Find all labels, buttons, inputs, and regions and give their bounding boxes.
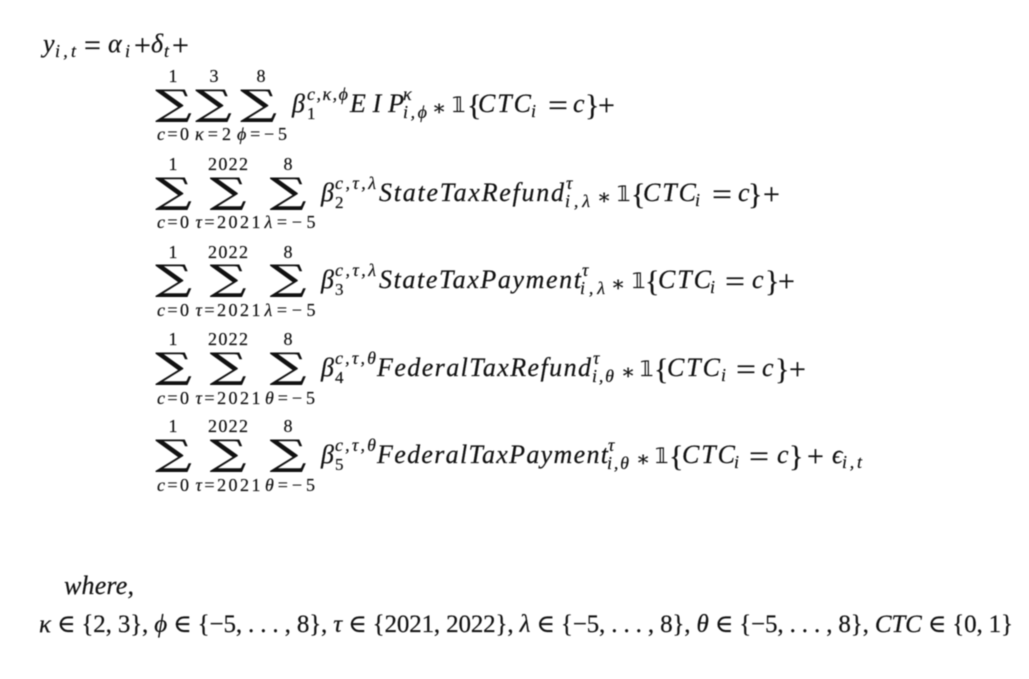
row 1 summations: 3 bbox=[210, 66, 218, 86]
first line: left-hand side: δ bbox=[151, 29, 164, 58]
row 5 expression: ∗ bbox=[636, 447, 650, 471]
row 5 expression: { bbox=[669, 440, 683, 473]
row 5 summations: 2022 bbox=[208, 416, 248, 436]
row 4: federal tax refund term bbox=[156, 329, 806, 408]
row 4 summations bbox=[156, 329, 315, 408]
row 3 summations: ∑ bbox=[210, 259, 246, 299]
row 1: EIP term bbox=[156, 66, 615, 144]
row 2 expression: ∗ bbox=[597, 185, 611, 209]
row 2 expression: StateTaxRefund bbox=[379, 178, 565, 207]
row 3 expression: τ bbox=[582, 260, 589, 280]
row 1 expression: i,ϕ bbox=[403, 102, 427, 122]
row 4 expression: = bbox=[736, 353, 756, 386]
row 1 expression: 1 bbox=[307, 104, 316, 123]
row 2: state tax refund term bbox=[156, 154, 780, 232]
row 2 expression: { bbox=[631, 178, 645, 211]
row 1 expression: 𝟙 bbox=[452, 93, 465, 117]
row 5 expression: β bbox=[320, 440, 334, 469]
row 2 summations: τ=2021 bbox=[196, 212, 260, 232]
row 3 expression: i,λ bbox=[580, 278, 605, 298]
row 5 expression: } bbox=[789, 440, 803, 473]
row 2 expression bbox=[320, 173, 780, 212]
row 1 expression: i bbox=[531, 101, 536, 121]
row 2 expression: β bbox=[320, 178, 334, 207]
first line: left-hand side: i,t bbox=[55, 41, 77, 61]
row 1 summations: 8 bbox=[256, 66, 266, 86]
row 4 expression: CTC bbox=[667, 353, 721, 382]
row 3: state tax payment term bbox=[156, 242, 795, 320]
row 2 expression: c bbox=[738, 178, 750, 207]
row 2 expression: = bbox=[712, 178, 732, 211]
row 4 summations: ∑ bbox=[270, 347, 306, 387]
row 4 expression: 𝟙 bbox=[640, 357, 653, 381]
row 2 summations: ∑ bbox=[156, 172, 192, 212]
row 5 summations: θ=−5 bbox=[265, 475, 315, 495]
row 1 expression: CTC bbox=[478, 89, 532, 118]
row 4 summations: 1 bbox=[168, 329, 178, 349]
index set definitions: κ ∈ {2, 3}, ϕ ∈ {−5, . . . , 8}, τ ∈ {2021, 2022}, λ ∈ {−5, . . . , 8}, θ ∈ {−5, . . . , 8}, CTC ∈ {0, 1} bbox=[39, 611, 1013, 638]
row 1 expression: EIP bbox=[349, 89, 404, 118]
row 3 expression: ∗ bbox=[611, 272, 625, 296]
row 4 expression: τ bbox=[593, 348, 600, 368]
first line: left-hand side: t bbox=[164, 41, 170, 61]
row 4 summations: 2022 bbox=[208, 329, 248, 349]
row 5 expression: c bbox=[777, 440, 789, 469]
first line: left-hand side: = bbox=[84, 29, 101, 62]
row 3 expression: i bbox=[710, 277, 715, 297]
row 5 summations: 8 bbox=[284, 416, 292, 436]
row 2 expression: } bbox=[748, 178, 762, 211]
row 2 expression: + bbox=[763, 178, 780, 211]
row 3 expression: } bbox=[765, 265, 779, 298]
row 5 expression: 5 bbox=[335, 455, 344, 474]
row 3 expression: = bbox=[725, 265, 745, 298]
row 5 expression: τ bbox=[608, 435, 615, 455]
row 4 expression: i,θ bbox=[592, 366, 614, 386]
first line: left-hand side: α bbox=[108, 29, 123, 58]
first line: left-hand side: i bbox=[125, 41, 130, 61]
row 1 expression: ∗ bbox=[432, 96, 446, 120]
row 4 summations: c=0 bbox=[157, 388, 189, 408]
row 1 summations: 1 bbox=[168, 66, 178, 86]
row 2 expression: CTC bbox=[643, 178, 697, 207]
row 3 summations bbox=[156, 242, 316, 320]
row 1 summations: ∑ bbox=[156, 84, 192, 124]
row 5 summations: c=0 bbox=[157, 475, 189, 495]
row 2 summations: 1 bbox=[168, 154, 178, 174]
row 3 expression: c bbox=[752, 265, 764, 294]
row 4 summations: θ=−5 bbox=[265, 388, 315, 408]
row 3 expression: { bbox=[645, 265, 659, 298]
row 4 expression: β bbox=[320, 353, 334, 382]
row 2 summations: ∑ bbox=[270, 172, 306, 212]
row 4 expression: c bbox=[762, 353, 774, 382]
row 4 expression: ∗ bbox=[621, 360, 635, 384]
row 3 expression: CTC bbox=[658, 265, 712, 294]
row 1 summations: c=0 bbox=[157, 124, 189, 144]
row 4 summations: ∑ bbox=[210, 347, 246, 387]
row 2 expression: 2 bbox=[335, 193, 344, 212]
row 4 expression: 4 bbox=[335, 368, 344, 387]
row 4 expression: { bbox=[654, 353, 668, 386]
row 3 summations: c=0 bbox=[157, 300, 189, 320]
row 1 expression: + bbox=[598, 89, 615, 122]
row 1 summations: ∑ bbox=[196, 84, 232, 124]
row 4 summations: ∑ bbox=[156, 347, 192, 387]
row 5 expression: 𝟙 bbox=[655, 444, 668, 468]
row 2 expression: i,λ bbox=[565, 191, 590, 211]
row 5 summations bbox=[156, 416, 315, 495]
row 3 expression: StateTaxPayment bbox=[379, 265, 582, 294]
row 1 summations bbox=[156, 66, 287, 144]
first line: left-hand side: + bbox=[134, 29, 151, 62]
row 3 expression: 3 bbox=[335, 280, 344, 299]
row 1 summations: ∑ bbox=[240, 84, 276, 124]
row 4 expression: c,τ,θ bbox=[335, 348, 376, 368]
row 5 summations: ∑ bbox=[210, 434, 246, 474]
row 3 expression: 𝟙 bbox=[632, 269, 645, 293]
row 3 summations: 1 bbox=[168, 242, 178, 262]
row 2 summations: ∑ bbox=[210, 172, 246, 212]
row 1 summations: ϕ=−5 bbox=[237, 124, 287, 144]
row 5 summations: ∑ bbox=[156, 434, 192, 474]
first line: left-hand side: y bbox=[40, 29, 55, 58]
row 2 expression: 𝟙 bbox=[617, 182, 630, 206]
row 1 summations: κ=2 bbox=[195, 124, 231, 144]
row 1 expression: = bbox=[548, 89, 568, 122]
row 3 expression: β bbox=[320, 265, 334, 294]
row 3 summations: τ=2021 bbox=[196, 300, 260, 320]
row 1 expression: { bbox=[467, 89, 481, 122]
row 2 expression: τ bbox=[566, 173, 573, 193]
row 1 expression: c bbox=[573, 89, 585, 118]
row 5 expression: + bbox=[807, 440, 824, 473]
row 2 summations: 8 bbox=[284, 154, 292, 174]
first line: left-hand side bbox=[40, 29, 189, 62]
row 5 expression: i,t bbox=[842, 452, 863, 472]
row 4 expression: + bbox=[789, 353, 806, 386]
row 5 expression: ϵ bbox=[832, 440, 844, 469]
row 5 summations: ∑ bbox=[270, 434, 306, 474]
row 2 expression: i bbox=[695, 190, 700, 210]
row 5 expression: c,τ,θ bbox=[335, 435, 376, 455]
row 2 expression: c,τ,λ bbox=[335, 173, 376, 193]
row 5 summations: 1 bbox=[168, 416, 178, 436]
row 3 summations: 2022 bbox=[208, 242, 248, 262]
row 3 summations: 8 bbox=[284, 242, 292, 262]
row 3 summations: λ =−5 bbox=[264, 300, 316, 320]
row 5 expression: FederalTaxPayment bbox=[376, 440, 609, 469]
row 4 summations: 8 bbox=[284, 329, 292, 349]
row 1 expression: κ bbox=[403, 84, 412, 104]
row 4 summations: τ=2021 bbox=[196, 388, 260, 408]
row 3 summations: ∑ bbox=[270, 259, 306, 299]
row 2 summations: 2022 bbox=[208, 154, 248, 174]
row 4 expression bbox=[320, 348, 806, 387]
row 3 expression bbox=[320, 260, 795, 299]
row 2 summations: c=0 bbox=[157, 212, 189, 232]
row 1 expression bbox=[291, 84, 615, 123]
row 1 expression: c,κ,ϕ bbox=[307, 84, 348, 104]
row 5 expression: i,θ bbox=[607, 453, 629, 473]
row 4 expression: FederalTaxRefund bbox=[376, 353, 592, 382]
row 4 expression: } bbox=[775, 353, 789, 386]
row 5 expression: CTC bbox=[682, 440, 736, 469]
row 1 expression: β bbox=[291, 89, 305, 118]
row 5 expression bbox=[320, 435, 863, 474]
row 4 expression: i bbox=[721, 365, 726, 385]
row 3 expression: + bbox=[778, 265, 795, 298]
row 5: federal tax payment term bbox=[156, 416, 863, 495]
row 5 expression: = bbox=[749, 440, 769, 473]
row 3 summations: ∑ bbox=[156, 259, 192, 299]
row 5 expression: i bbox=[734, 452, 739, 472]
row 2 summations: λ =−5 bbox=[264, 212, 316, 232]
row 3 expression: c,τ,λ bbox=[335, 260, 376, 280]
row 5 summations: τ=2021 bbox=[196, 475, 260, 495]
row 2 summations bbox=[156, 154, 316, 232]
where label: where, bbox=[64, 571, 134, 600]
row 1 expression: } bbox=[585, 89, 599, 122]
first line: left-hand side: + bbox=[172, 29, 189, 62]
